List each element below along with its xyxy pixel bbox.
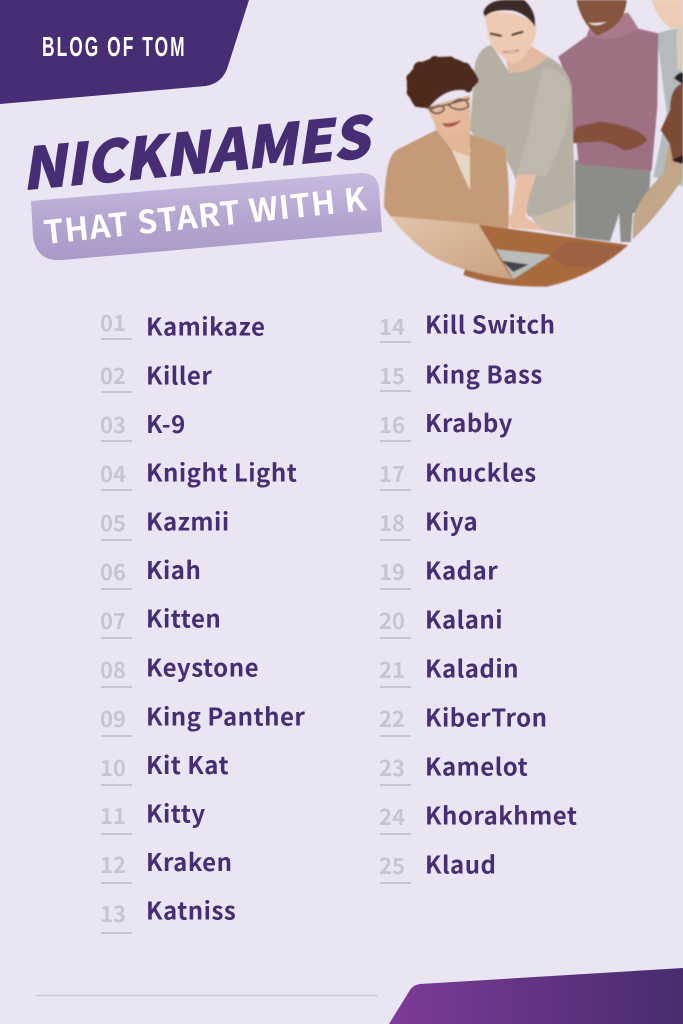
item 08: 08 bbox=[100, 653, 126, 685]
subtitle pill bbox=[31, 173, 382, 260]
item 17 bbox=[379, 454, 537, 490]
item 23: 23 bbox=[379, 751, 405, 783]
item 21: Kaladin bbox=[425, 650, 519, 684]
item 13 bbox=[100, 892, 236, 933]
item 16: 16 bbox=[379, 408, 405, 440]
item 25 bbox=[379, 846, 496, 883]
woman in tan blazer bbox=[384, 56, 509, 230]
item 19: 19 bbox=[379, 555, 405, 587]
item 11: 11 bbox=[100, 799, 126, 831]
item 14: 14 bbox=[379, 310, 405, 342]
person in pink sweater bbox=[558, 0, 658, 242]
item 01 bbox=[100, 306, 265, 342]
item 15: 15 bbox=[379, 359, 405, 391]
item 18 bbox=[379, 502, 478, 540]
curly hair bbox=[406, 56, 479, 107]
woman in grey sweater bbox=[470, 0, 575, 236]
item 16: Krabby bbox=[425, 404, 513, 439]
item 13: 13 bbox=[100, 897, 126, 929]
item 12 bbox=[100, 843, 232, 883]
item 23: Kamelot bbox=[425, 748, 528, 782]
item 05 bbox=[100, 502, 230, 540]
item 08: Keystone bbox=[146, 648, 259, 684]
item 25: 25 bbox=[379, 849, 405, 881]
item 06: Kiah bbox=[146, 551, 201, 586]
brand text: BLOG OF TOM bbox=[42, 31, 185, 62]
item 09: King Panther bbox=[146, 698, 305, 732]
item 20 bbox=[379, 600, 503, 638]
item 01: Kamikaze bbox=[146, 308, 265, 342]
item 06 bbox=[100, 551, 201, 589]
item 11: Kitty bbox=[146, 794, 206, 830]
nickname list: column 2 bbox=[379, 306, 578, 883]
item 02: Killer bbox=[146, 356, 212, 392]
item 22: 22 bbox=[379, 702, 405, 734]
header banner bbox=[0, 0, 249, 104]
item 07 bbox=[100, 600, 221, 638]
item 22: KiberTron bbox=[425, 698, 548, 734]
item 25: Klaud bbox=[425, 846, 496, 880]
item 06: 06 bbox=[100, 555, 126, 587]
item 17: 17 bbox=[379, 457, 405, 489]
laptop bbox=[390, 216, 551, 279]
item 12: 12 bbox=[100, 848, 126, 880]
item 04: 04 bbox=[100, 457, 126, 489]
item 01: 01 bbox=[100, 306, 126, 338]
subtitle text: THAT START WITH K bbox=[41, 174, 369, 254]
item 04: Knight Light bbox=[146, 454, 297, 488]
item 20: 20 bbox=[379, 604, 405, 636]
item 13: Katniss bbox=[146, 892, 236, 926]
item 09: 09 bbox=[100, 702, 126, 734]
man on the right bbox=[550, 73, 683, 267]
item 17: Knuckles bbox=[425, 454, 537, 488]
item 05: 05 bbox=[100, 506, 126, 538]
far right person bbox=[652, 0, 683, 187]
item 10: Kit Kat bbox=[146, 746, 229, 781]
item 22 bbox=[379, 698, 548, 736]
item 02: 02 bbox=[100, 359, 126, 391]
footer shape bbox=[389, 968, 683, 1024]
item 21: 21 bbox=[379, 653, 405, 685]
item 18: Kiya bbox=[425, 502, 478, 538]
item 23 bbox=[379, 748, 528, 785]
nickname list: column 1 bbox=[100, 306, 305, 933]
item 10: 10 bbox=[100, 751, 126, 783]
item 20: Kalani bbox=[425, 600, 503, 636]
item 14: Kill Switch bbox=[425, 306, 555, 340]
item 24: 24 bbox=[379, 800, 405, 832]
item 05: Kazmii bbox=[146, 502, 230, 538]
item 16 bbox=[379, 404, 513, 441]
table bbox=[463, 225, 628, 287]
item 07: 07 bbox=[100, 604, 126, 636]
item 11 bbox=[100, 794, 206, 834]
item 18: 18 bbox=[379, 506, 405, 538]
item 12: Kraken bbox=[146, 843, 232, 878]
item 19 bbox=[379, 552, 498, 589]
title: nicknames: NICKNAMES bbox=[20, 90, 381, 207]
item 24: Khorakhmet bbox=[425, 796, 578, 832]
item 07: Kitten bbox=[146, 600, 221, 634]
item 15: King Bass bbox=[425, 356, 543, 390]
item 08 bbox=[100, 648, 259, 687]
item 03 bbox=[100, 405, 186, 441]
item 19: Kadar bbox=[425, 552, 498, 586]
item 21 bbox=[379, 650, 519, 687]
item 10 bbox=[100, 746, 229, 785]
item 02 bbox=[100, 356, 212, 392]
item 03: K-9 bbox=[146, 405, 186, 440]
item 03: 03 bbox=[100, 408, 126, 440]
team photo illustration bbox=[384, 0, 683, 287]
